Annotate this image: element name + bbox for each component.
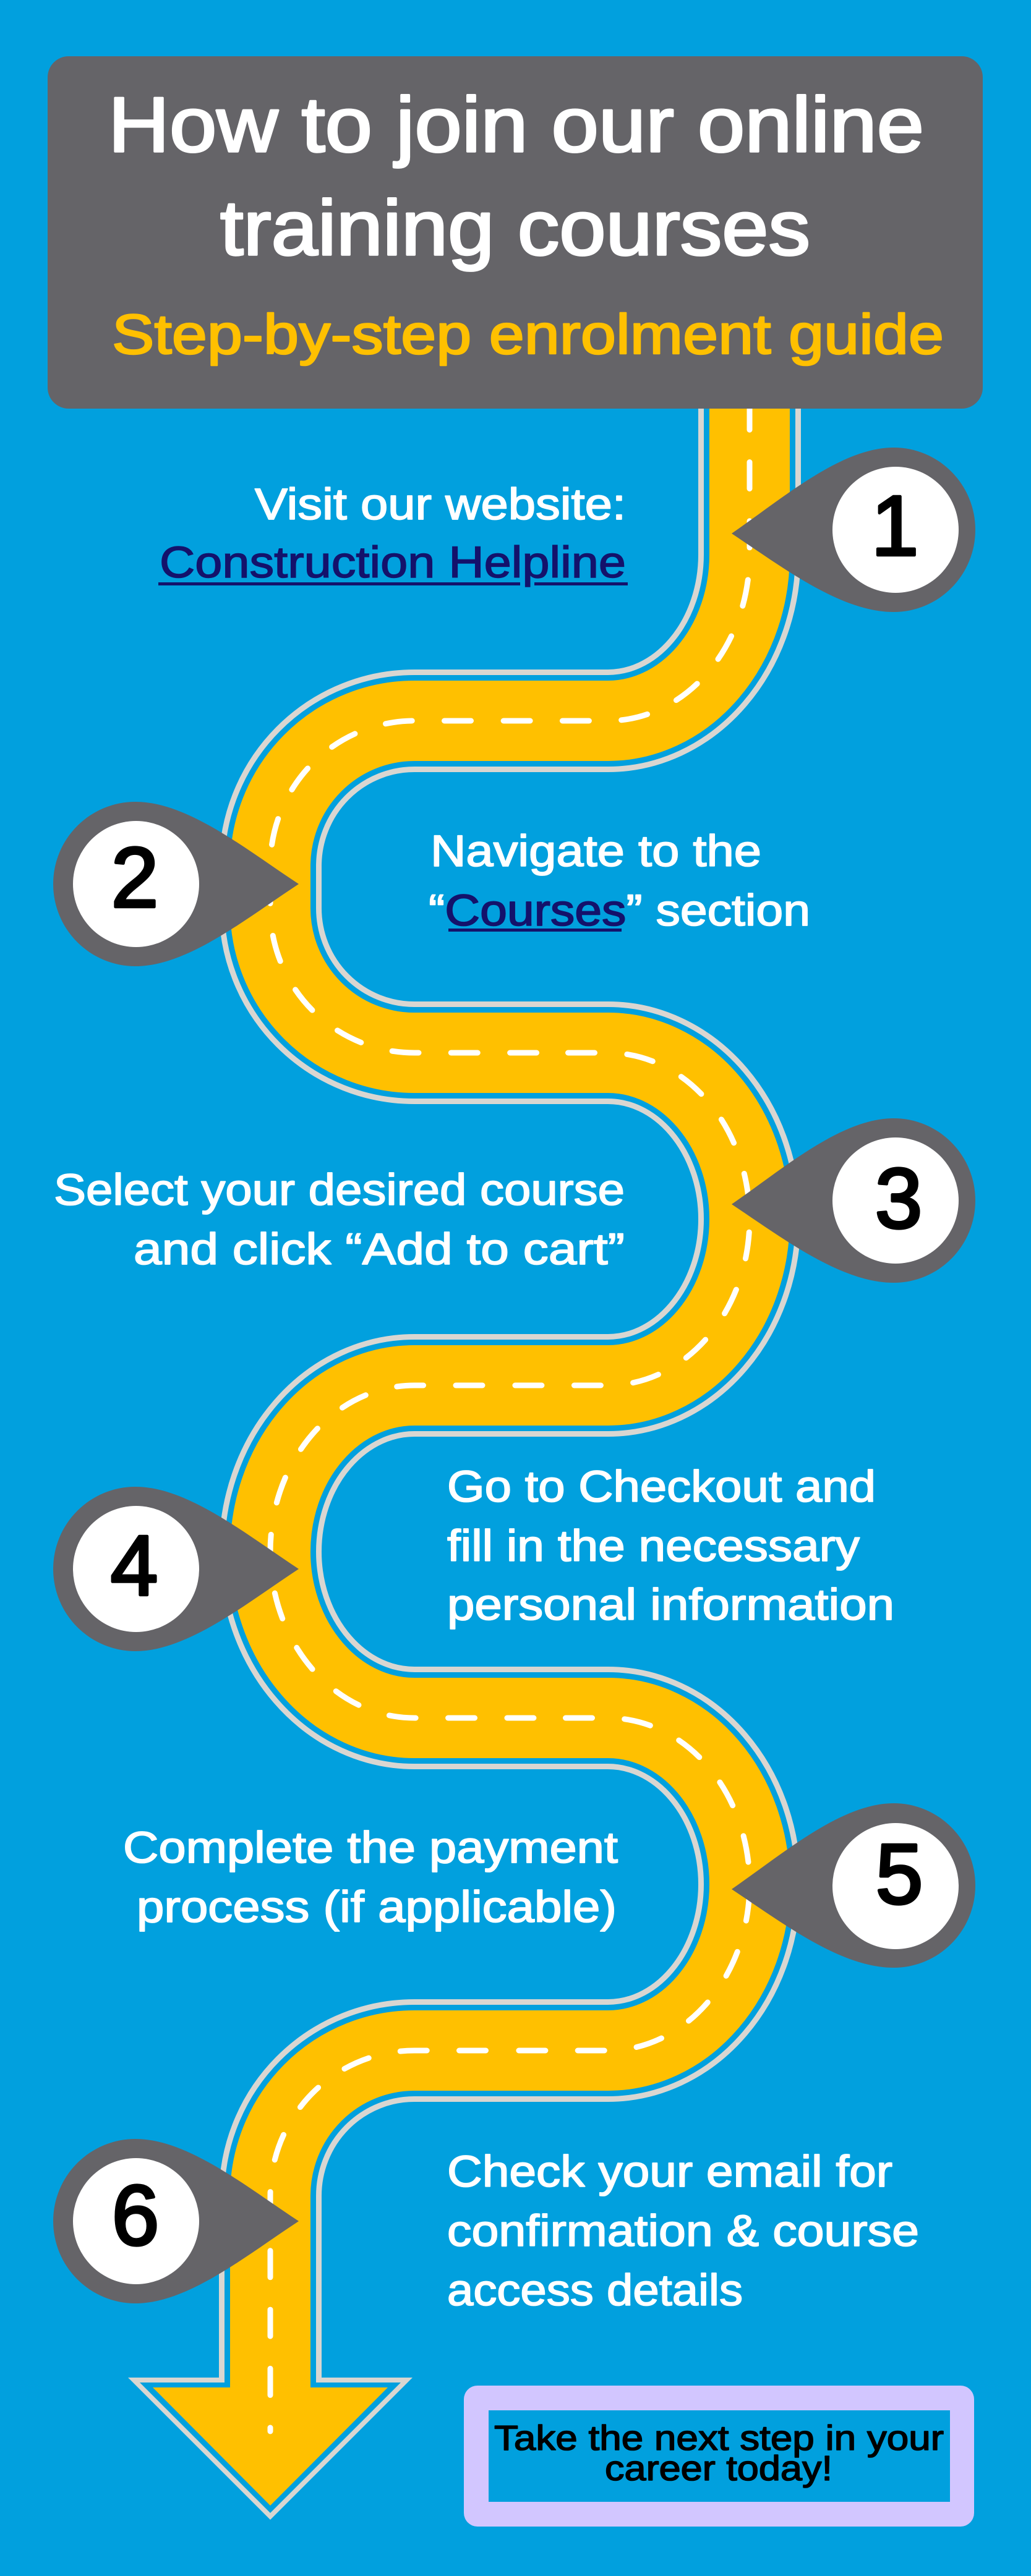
panel: title header: [48, 56, 983, 409]
step 5 text: [123, 1824, 618, 1932]
step 3 text: Select your desired course: [54, 1166, 625, 1215]
road: white centre dashes: [270, 408, 750, 2431]
pin: step 3: 3: [875, 1151, 922, 1246]
pin: step 6: 6: [112, 2168, 159, 2263]
subtitle: Step-by-step enrolment guide: [112, 304, 944, 366]
pin: step 3: [732, 1118, 975, 1283]
pin: step 1: [732, 448, 975, 612]
callout text line 2: career today!: [605, 2449, 832, 2488]
pin: step 1: 1: [871, 478, 918, 574]
pin: step 4: [53, 1487, 299, 1651]
step 4 text: fill in the necessary: [447, 1522, 860, 1571]
step 1 text: [158, 480, 628, 587]
step 4 text: personal information: [447, 1581, 894, 1630]
step 2 text: “Courses ” section: [429, 886, 810, 935]
step 5 text: Complete the payment: [123, 1824, 618, 1872]
step 6 text: confirmation & course: [447, 2207, 919, 2256]
step 6 text: Check your email for: [447, 2148, 892, 2196]
step 1 text: Visit our website:: [255, 480, 626, 529]
title line 2: training courses: [220, 184, 810, 271]
step 4 text: [447, 1463, 894, 1630]
pin: step 4: 4: [111, 1518, 158, 1613]
pin: step 6: [53, 2139, 299, 2303]
pin: step 5: [732, 1803, 975, 1968]
step 5 text: process (if applicable): [137, 1883, 617, 1932]
step 2 text: [429, 827, 810, 935]
step 6 text: access details: [447, 2266, 743, 2315]
pin: step 2: [53, 802, 299, 966]
pin: step 2: 2: [111, 830, 158, 925]
step 4 text: Go to Checkout and: [447, 1463, 876, 1511]
callout: call to action: [464, 2386, 974, 2527]
link: Construction Helpline: Construction Helpline: [160, 538, 626, 587]
step 2 text: Navigate to the: [430, 827, 761, 876]
step 6 text: [447, 2148, 919, 2315]
road: grey edge lines: [128, 396, 750, 2520]
step 3 text: and click “Add to cart”: [134, 1225, 625, 1274]
callout text line 1: Take the next step in your: [494, 2418, 944, 2458]
title line 1: How to join our online: [108, 81, 924, 168]
step 3 text: [54, 1166, 625, 1274]
winding road with arrow head: [128, 396, 750, 2520]
pin: step 5: 5: [876, 1827, 923, 1922]
